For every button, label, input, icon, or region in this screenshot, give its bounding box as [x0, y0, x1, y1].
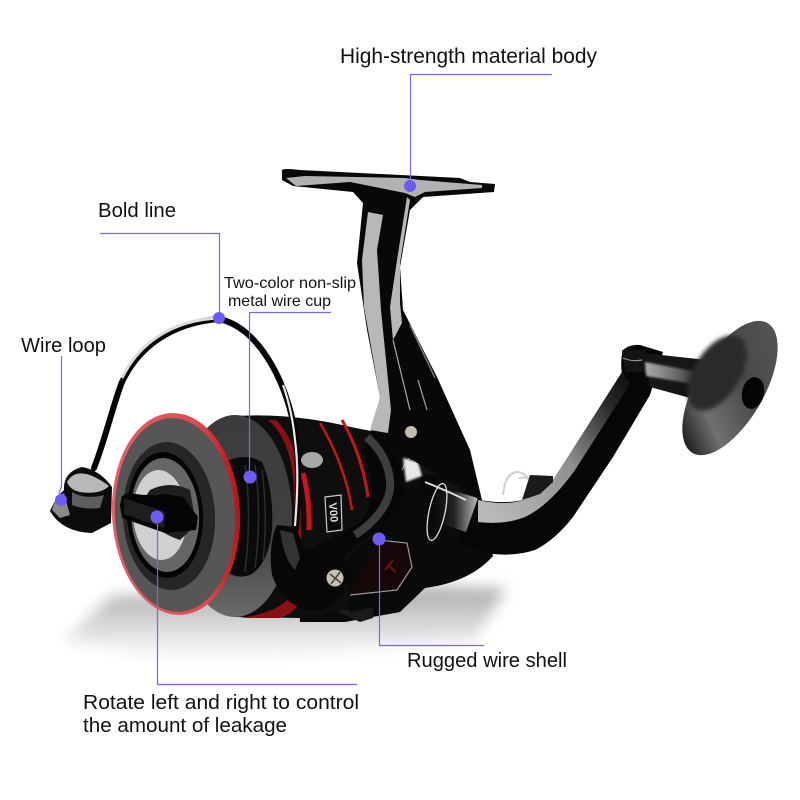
line roller [50, 467, 112, 533]
callout: Rugged wire shell [372, 532, 567, 672]
callout: Wire loop: Wire loop [21, 335, 106, 357]
main spool front with red ring [107, 410, 245, 618]
callout: Two-color non-slip metal wire cup [224, 275, 356, 484]
callout: Bold line: Bold line [98, 200, 176, 222]
front bail arm and pivot [271, 433, 405, 610]
callout: Rotate left and right [83, 510, 359, 737]
callout: Rotate left and right: the amount of leakage [83, 715, 287, 737]
main gear body with red stripes [235, 415, 403, 618]
callout: Two-color non-slip metal wire cup: Two-color non-slip [224, 275, 356, 292]
lower side cover [345, 503, 427, 612]
callout: Bold line [98, 200, 225, 324]
callout: Two-color non-slip metal wire cup: metal wire cup [228, 293, 331, 310]
fishing reel illustration [50, 169, 797, 622]
callout: High-strength material body: High-strength material body [340, 45, 597, 68]
foot fin [333, 608, 373, 622]
bail wire [94, 318, 298, 528]
callout: Rugged wire shell: Rugged wire shell [407, 650, 567, 672]
rear spool flange [178, 415, 302, 618]
handle crank arm [458, 345, 663, 555]
callout: Rotate left and right: Rotate left and right to control [83, 692, 359, 714]
main gear body with red stripes: V00 [326, 502, 340, 523]
rotor stem and rod foot [282, 169, 495, 500]
rear wheel housing [402, 450, 470, 500]
callout: High-strength material body [340, 45, 597, 192]
spool drag knob [120, 493, 198, 533]
ground shadow [62, 585, 506, 664]
small line clip [503, 472, 540, 495]
collar and ring on arm [420, 474, 478, 542]
handle stem and knob [643, 306, 797, 470]
callout: Wire loop [21, 335, 106, 506]
reel body rear [290, 425, 493, 622]
